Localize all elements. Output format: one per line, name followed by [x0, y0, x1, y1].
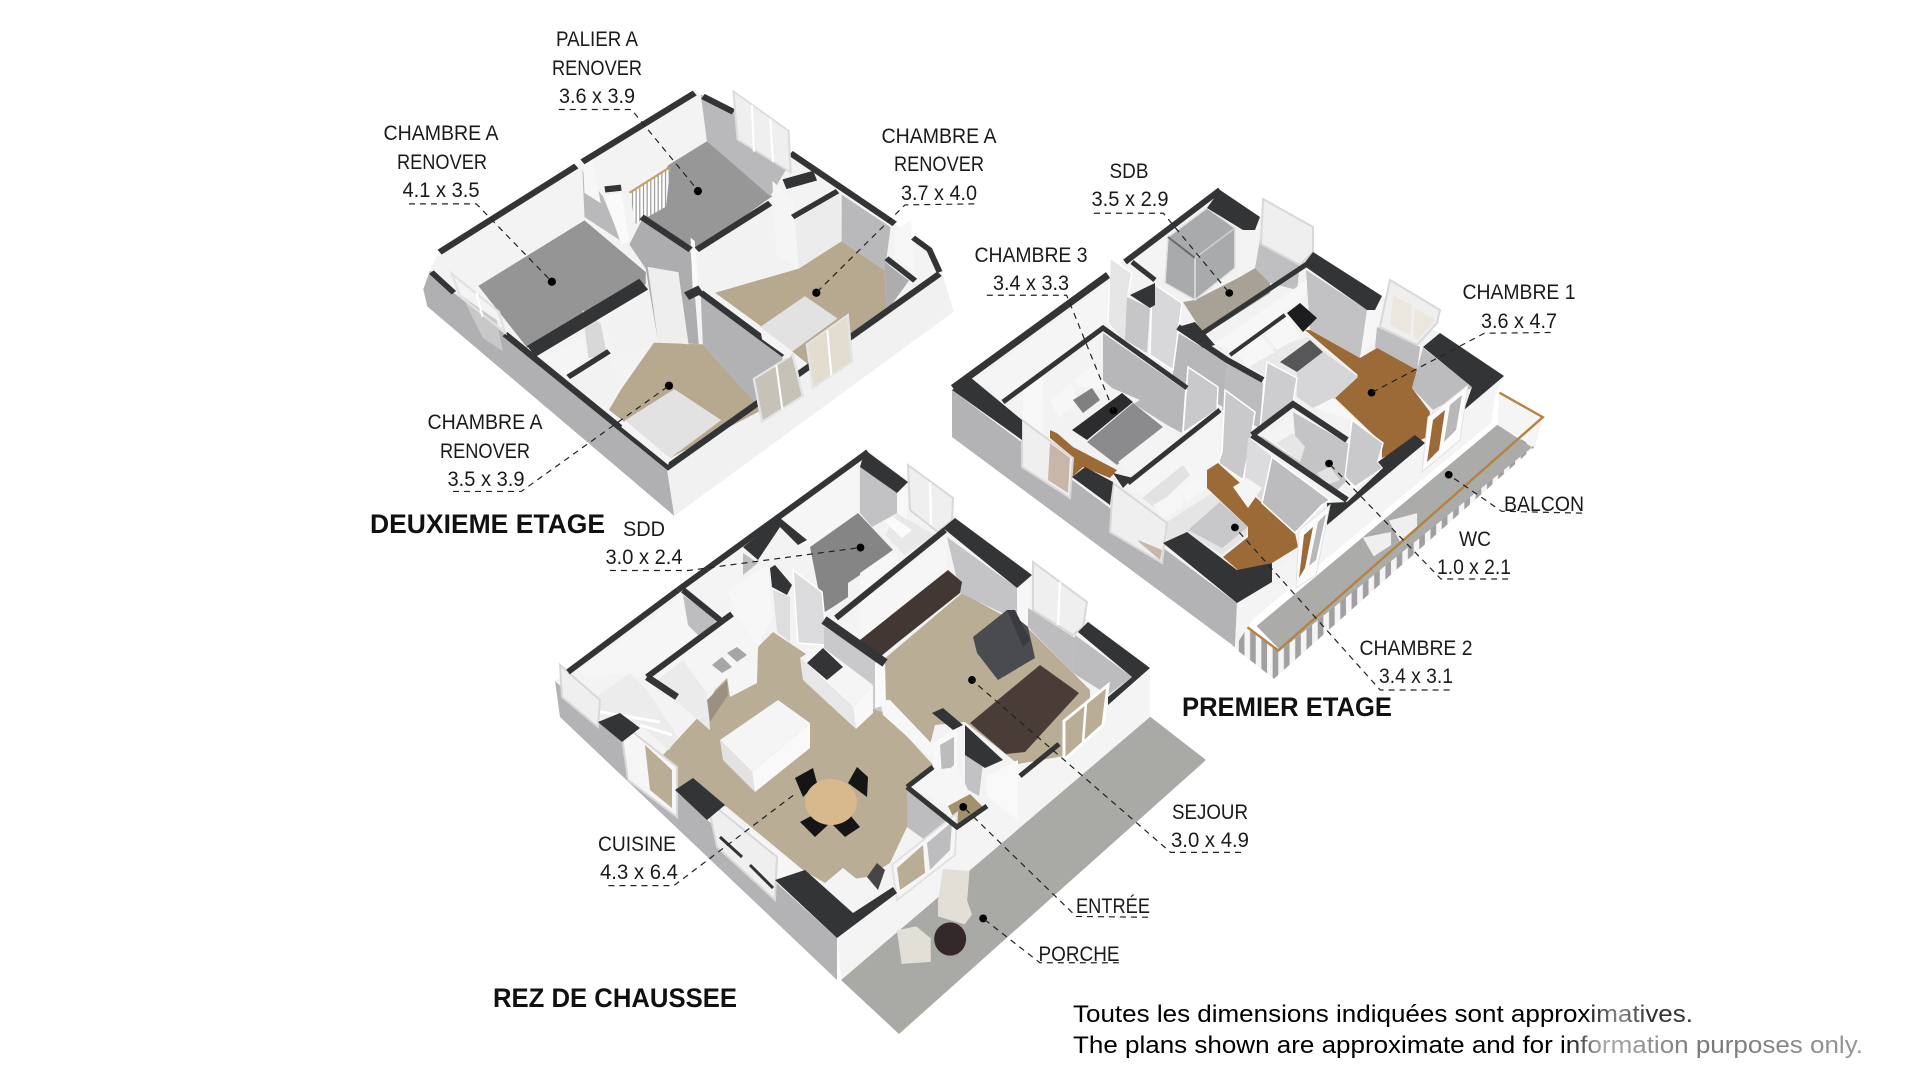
labels: premier etage: 3.4 x 3.1 [1379, 665, 1453, 688]
labels: premier etage: 3.5 x 2.9 [1092, 188, 1168, 211]
porch furniture, markers and leaders [608, 544, 1241, 964]
room: chambre droite floor [715, 241, 887, 365]
labels: deuxieme etage: RENOVER [894, 153, 984, 176]
room: SDB [1132, 199, 1313, 333]
labels: premier etage: CHAMBRE 2 [1360, 637, 1472, 660]
labels: premier etage: 3.6 x 4.7 [1481, 310, 1557, 333]
heading: rez de chaussee: REZ DE CHAUSSEE [493, 983, 737, 1013]
stairs [596, 673, 678, 750]
labels: deuxieme etage: 3.7 x 4.0 [901, 182, 977, 205]
markers and leaders [987, 213, 1582, 690]
labels: premier etage: CHAMBRE 3 [974, 244, 1088, 267]
room markers [548, 187, 820, 390]
dining set [795, 767, 868, 837]
labels: rez de chaussee: CUISINE [598, 833, 676, 856]
room: palier floor [642, 141, 772, 250]
room: hall and doors [1108, 258, 1255, 480]
porch [841, 715, 1206, 1034]
footer note [1073, 1001, 1863, 1059]
room: SDD [782, 463, 953, 613]
labels: rez de chaussee: 4.3 x 6.4 [600, 861, 678, 884]
stairs [629, 167, 670, 224]
labels: rez de chaussee: SDD [623, 518, 665, 541]
room: chambre 1 [1215, 270, 1473, 458]
labels: premier etage: SDB [1110, 160, 1148, 183]
heading: premier etage: PREMIER ETAGE [1182, 692, 1392, 722]
labels: rez de chaussee: SEJOUR [1172, 801, 1248, 824]
labels: rez de chaussee: ENTRÉE [1076, 895, 1150, 918]
labels: premier etage: BALCON [1504, 493, 1584, 516]
island [720, 700, 810, 792]
room: chambre bas floor [609, 343, 762, 458]
labels: deuxieme etage: 3.5 x 3.9 [448, 468, 524, 491]
labels: rez de chaussee [598, 518, 1249, 966]
leaders [409, 110, 974, 491]
labels: deuxieme etage: RENOVER [552, 57, 642, 80]
labels: rez de chaussee: 3.0 x 2.4 [606, 546, 683, 569]
dark wall tops [568, 450, 1150, 938]
labels: rez de chaussee: PORCHE [1038, 943, 1120, 966]
labels: deuxieme etage: RENOVER [440, 440, 530, 463]
labels: deuxieme etage: 3.6 x 3.9 [559, 85, 635, 108]
dark wall tops [431, 93, 940, 467]
labels: deuxieme etage: CHAMBRE A [882, 125, 996, 148]
floor plan: deuxieme etage [409, 91, 974, 516]
room: chambre gauche floor [478, 220, 646, 348]
labels: premier etage: 1.0 x 2.1 [1437, 556, 1511, 579]
labels: deuxieme etage: CHAMBRE A [384, 122, 498, 145]
windows [452, 91, 852, 422]
footer note: The plans shown are approximate and for information purposes only. [1073, 1032, 1863, 1059]
footer note: Toutes les dimensions indiquées sont approximatives. [1073, 1001, 1693, 1028]
dark wall tops [952, 190, 1504, 603]
room: chambre 3 [975, 283, 1185, 498]
balcony [1233, 393, 1543, 679]
lower walls and windows [560, 665, 1018, 913]
labels: deuxieme etage: PALIER A [556, 28, 638, 51]
labels: deuxieme etage: RENOVER [397, 151, 487, 174]
heading: deuxieme etage: DEUXIEME ETAGE [370, 509, 605, 539]
floor plan: premier etage [952, 190, 1582, 690]
labels: premier etage: CHAMBRE 1 [1462, 281, 1576, 304]
room: chambre 2 [1110, 417, 1330, 572]
labels: deuxieme etage: CHAMBRE A [428, 411, 542, 434]
french doors [1296, 385, 1468, 588]
room: cuisine floor [663, 632, 935, 883]
room: WC [1252, 412, 1383, 500]
floor plan: rez de chaussee [555, 450, 1241, 1034]
labels: premier etage: 3.4 x 3.3 [993, 272, 1069, 295]
kitchen walls and units [575, 552, 933, 757]
labels: deuxieme etage [384, 28, 996, 491]
labels: rez de chaussee: 3.0 x 4.9 [1171, 829, 1249, 852]
beds [621, 296, 838, 465]
labels: premier etage: WC [1459, 528, 1491, 551]
room: sejour [860, 537, 1132, 764]
labels: premier etage [974, 160, 1584, 688]
labels: deuxieme etage: 4.1 x 3.5 [402, 179, 480, 202]
